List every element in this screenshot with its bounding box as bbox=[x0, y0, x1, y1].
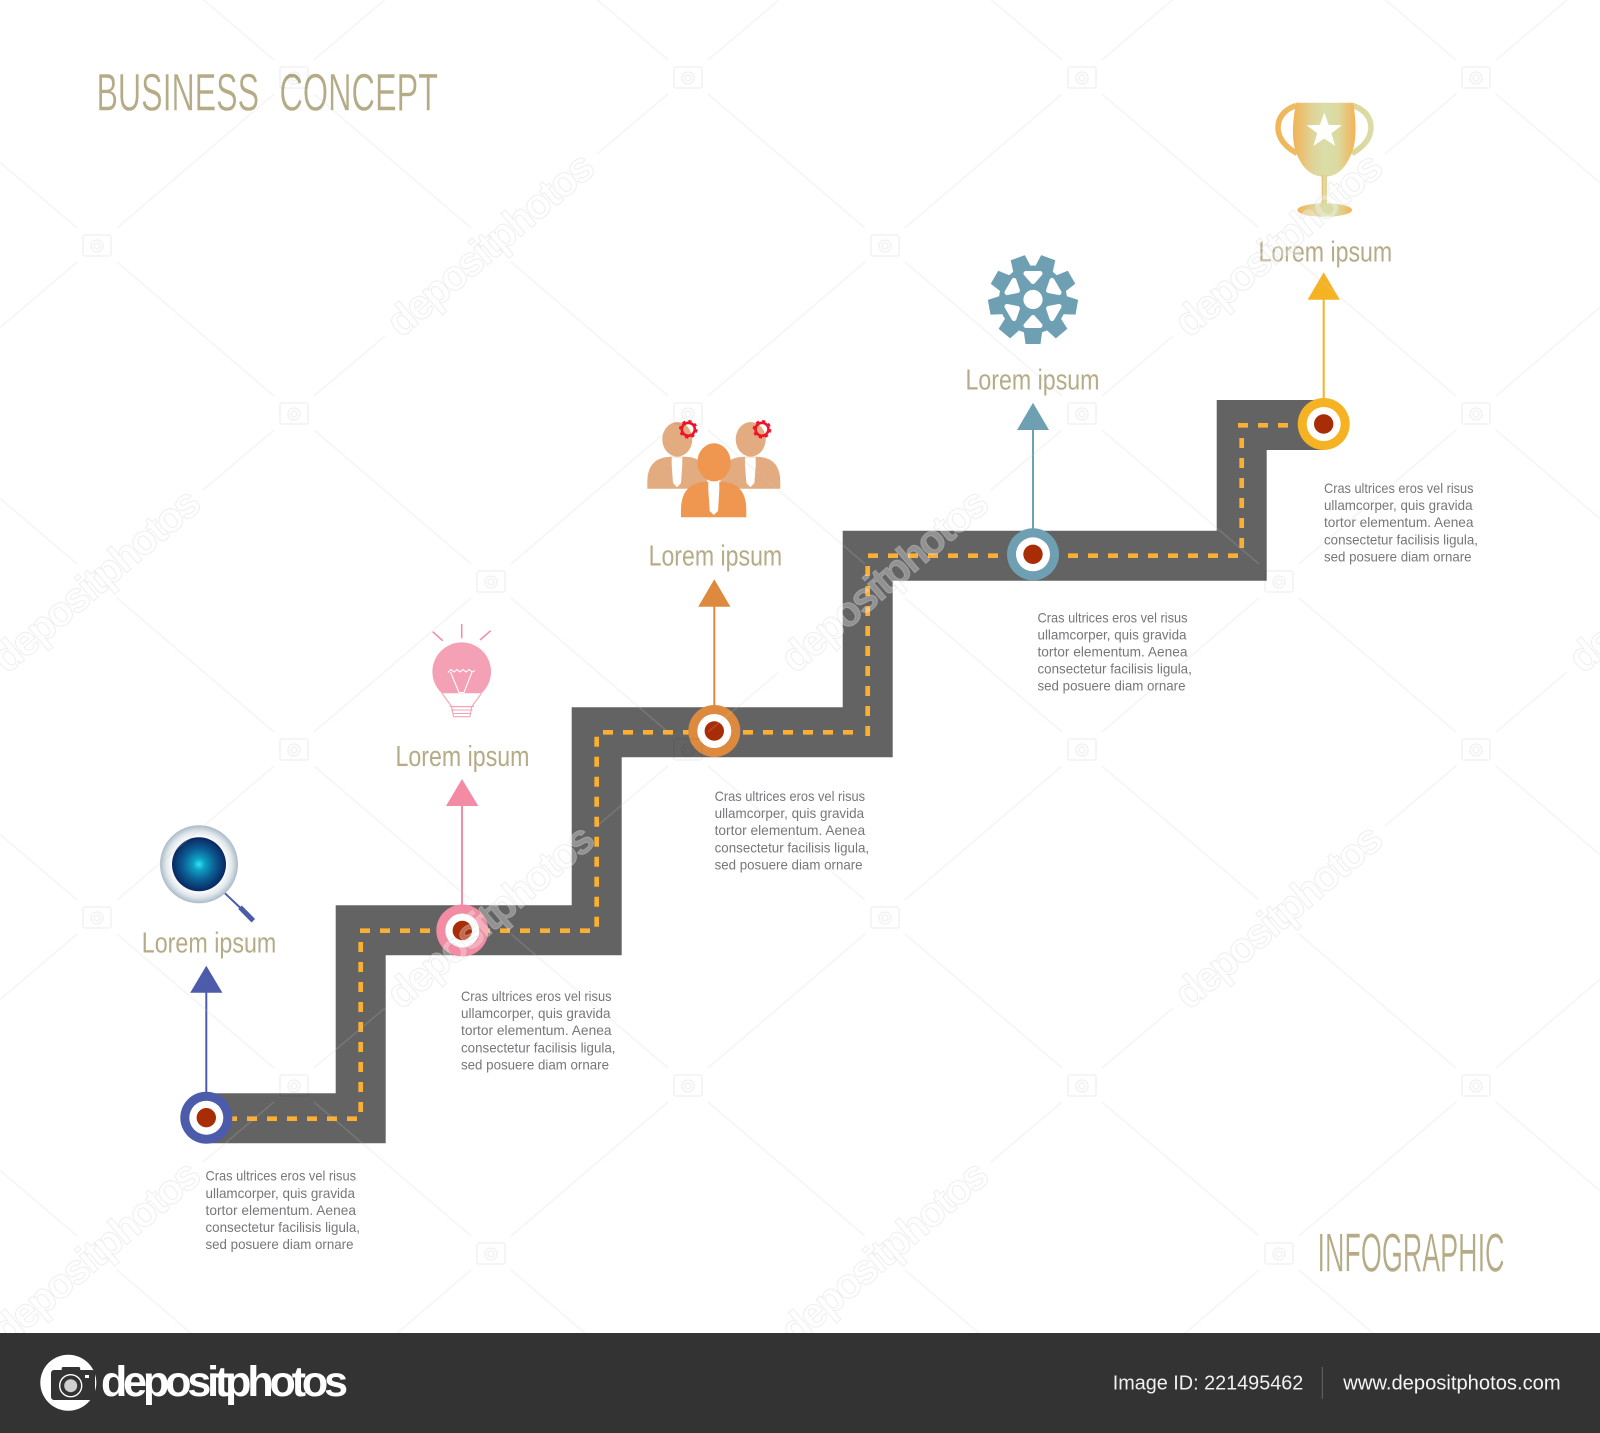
step 5 text: tortor elementum. Aenea bbox=[1324, 514, 1474, 530]
watermark overlay: depositphotos bbox=[1165, 814, 1391, 1018]
title: business concept: CONCEPT bbox=[280, 64, 438, 123]
step 4 marker bbox=[1007, 528, 1059, 580]
step 5 marker bbox=[1298, 398, 1350, 450]
back right person bbox=[720, 421, 780, 489]
step 5 label: Lorem ipsum bbox=[1258, 237, 1392, 269]
step 4 text: sed posuere diam ornare bbox=[1038, 678, 1186, 694]
watermark overlay: depositphotos bbox=[377, 142, 603, 346]
step 2 arrow bbox=[446, 779, 478, 908]
step 4 text: consectetur facilisis ligula, bbox=[1038, 661, 1192, 677]
road centre dashes bbox=[232, 425, 1290, 1119]
step 1 text bbox=[206, 1168, 360, 1252]
step 2 text: tortor elementum. Aenea bbox=[461, 1022, 612, 1038]
icon: gear bbox=[988, 254, 1078, 344]
watermark overlay: depositphotos bbox=[771, 478, 997, 682]
step 3 text: consectetur facilisis ligula, bbox=[715, 839, 869, 855]
step 3 marker bbox=[688, 705, 740, 757]
step 3 text bbox=[715, 788, 869, 872]
step 5 text: ullamcorper, quis gravida bbox=[1324, 497, 1473, 513]
step 2 text: ullamcorper, quis gravida bbox=[461, 1005, 611, 1021]
staircase road bbox=[206, 425, 1324, 1119]
step 5 arrow bbox=[1308, 272, 1340, 403]
step 4 text bbox=[1038, 609, 1192, 694]
step 2 text: consectetur facilisis ligula, bbox=[461, 1039, 616, 1055]
step 1 text: Cras ultrices eros vel risus bbox=[206, 1168, 356, 1184]
step 5 text: sed posuere diam ornare bbox=[1324, 548, 1472, 564]
step 3 label: Lorem ipsum bbox=[649, 541, 782, 573]
step 4 text: ullamcorper, quis gravida bbox=[1038, 626, 1187, 642]
icon: light bulb bbox=[432, 624, 491, 717]
step 2 label: Lorem ipsum bbox=[396, 741, 530, 773]
step 1 label: Lorem ipsum bbox=[142, 928, 276, 960]
icon: team of people bbox=[647, 421, 780, 517]
step 4 text: Cras ultrices eros vel risus bbox=[1038, 609, 1188, 625]
title: business concept: BUSINESS bbox=[96, 64, 259, 123]
step 1 text: sed posuere diam ornare bbox=[206, 1236, 354, 1252]
step 2 marker bbox=[436, 904, 488, 956]
footer logo icon bbox=[40, 1355, 96, 1411]
image id: Image ID: 221495462 bbox=[1113, 1372, 1303, 1394]
watermark overlay: depositphotos bbox=[771, 1150, 997, 1354]
step 3 text: Cras ultrices eros vel risus bbox=[715, 788, 865, 804]
step 1 text: ullamcorper, quis gravida bbox=[206, 1185, 355, 1201]
website url: www.depositphotos.com bbox=[1342, 1372, 1561, 1394]
icon: trophy bbox=[1278, 103, 1371, 217]
icon: magnifying glass bbox=[160, 825, 253, 921]
footer bar bbox=[0, 1333, 1600, 1433]
step 5 text bbox=[1324, 480, 1478, 564]
front person bbox=[681, 443, 746, 517]
step 1 arrow bbox=[190, 966, 222, 1095]
step 3 text: ullamcorper, quis gravida bbox=[715, 805, 864, 821]
step 3 arrow bbox=[698, 579, 730, 710]
step 2 text: sed posuere diam ornare bbox=[461, 1056, 609, 1072]
step 4 label: Lorem ipsum bbox=[966, 364, 1100, 396]
road surface bbox=[206, 425, 1324, 1118]
step 2 text bbox=[461, 988, 616, 1072]
step 3 text: tortor elementum. Aenea bbox=[715, 822, 865, 838]
step 1 text: consectetur facilisis ligula, bbox=[206, 1219, 360, 1235]
watermark overlay: depositphotos bbox=[1165, 142, 1391, 346]
watermark overlay: depositphotos bbox=[377, 814, 603, 1018]
step 1 marker bbox=[180, 1092, 232, 1144]
step 4 arrow bbox=[1017, 403, 1049, 533]
step 5 text: Cras ultrices eros vel risus bbox=[1324, 480, 1474, 496]
back left person bbox=[647, 421, 707, 489]
step 2 text: Cras ultrices eros vel risus bbox=[461, 988, 612, 1004]
step 5 text: consectetur facilisis ligula, bbox=[1324, 531, 1478, 547]
step 3 text: sed posuere diam ornare bbox=[715, 856, 863, 872]
step 1 text: tortor elementum. Aenea bbox=[206, 1202, 356, 1218]
step 4 text: tortor elementum. Aenea bbox=[1038, 644, 1188, 660]
footer logo wordmark: depositphotos bbox=[101, 1358, 348, 1406]
